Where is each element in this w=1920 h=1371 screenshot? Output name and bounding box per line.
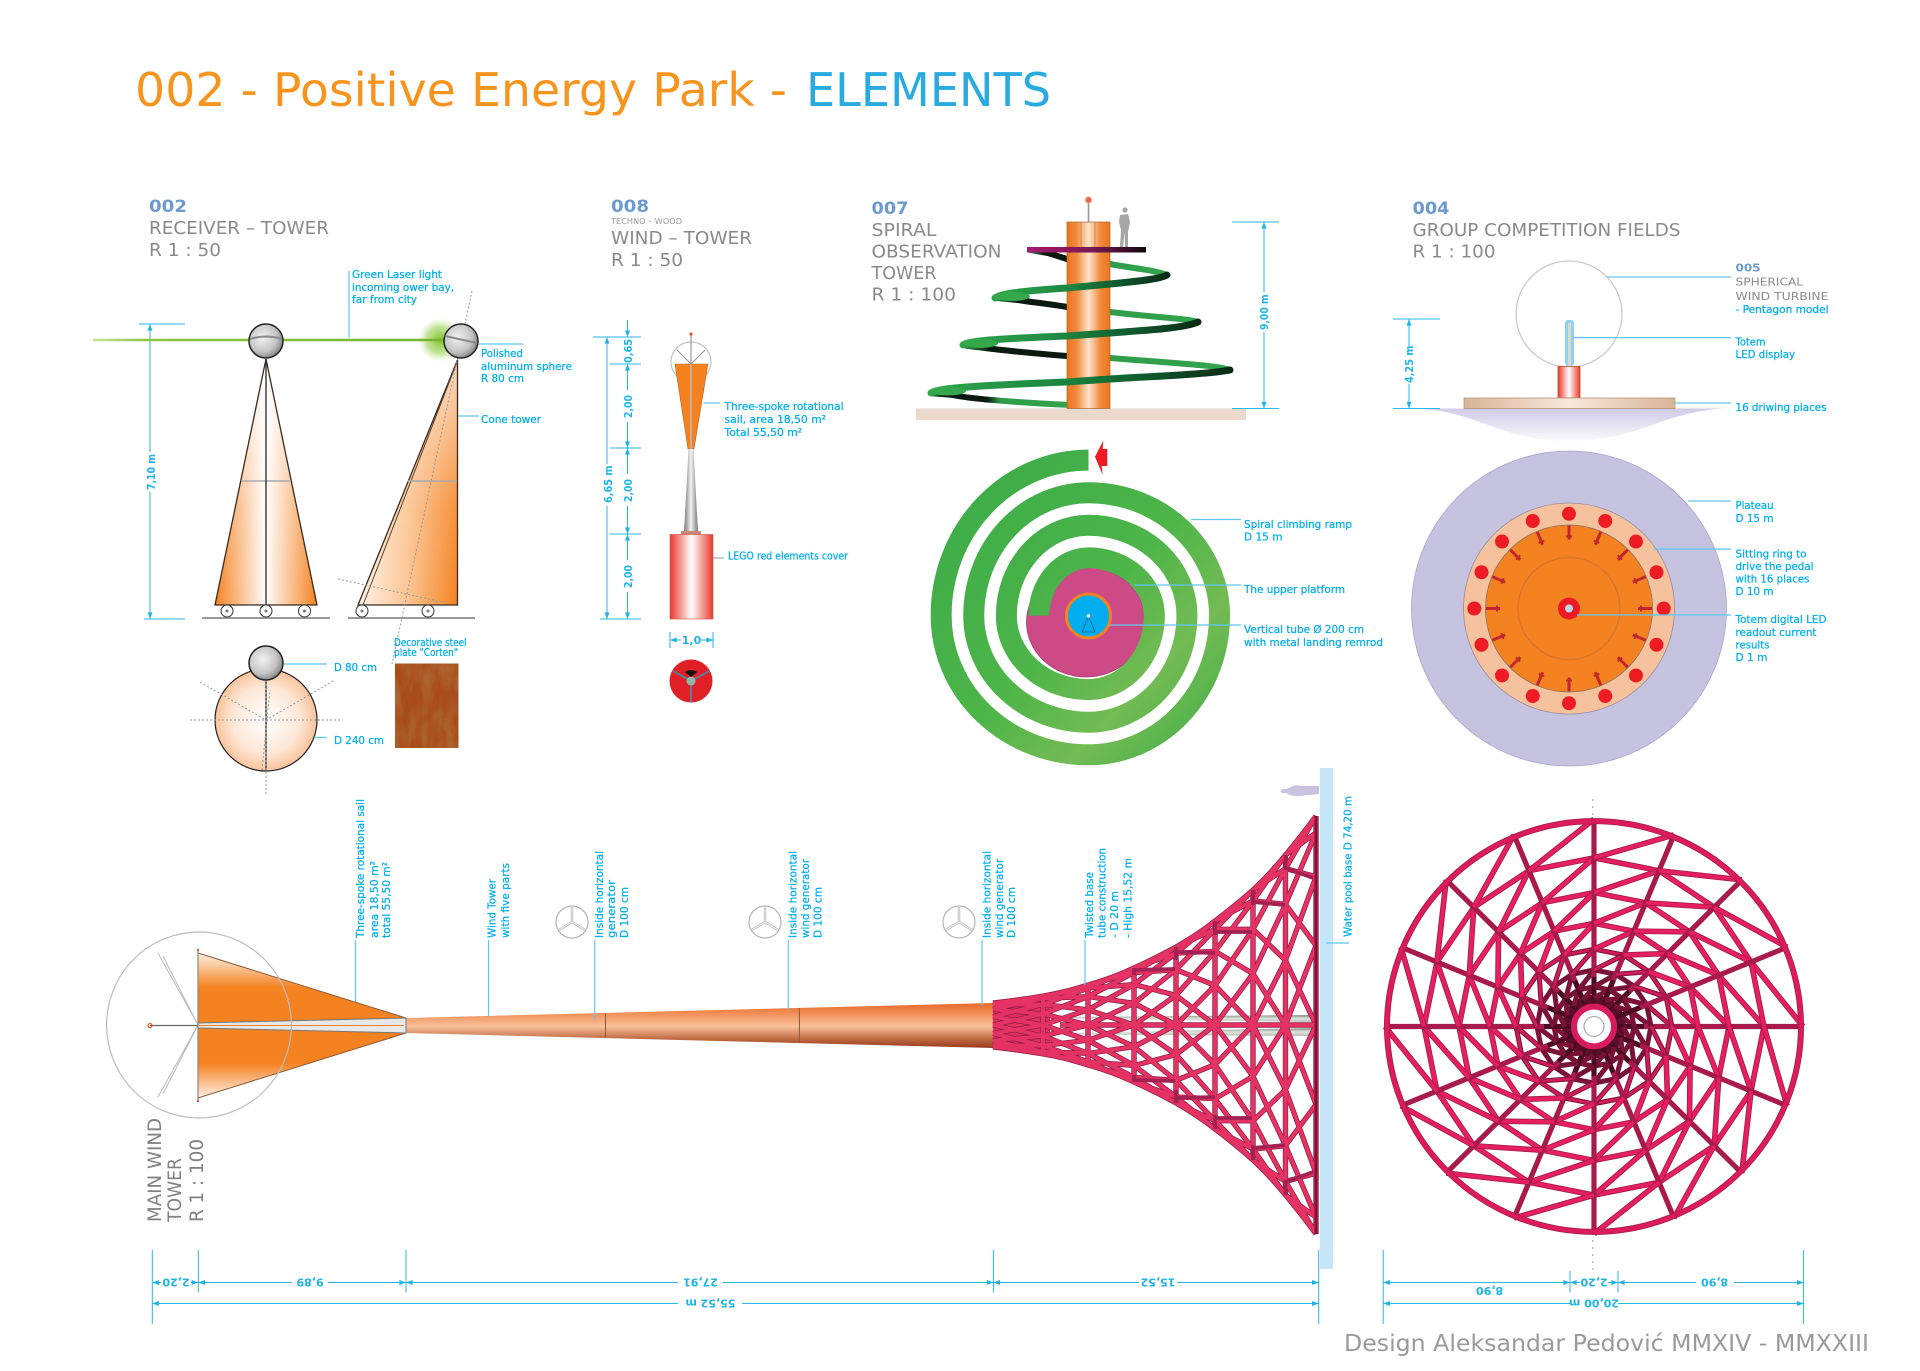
callout: spherical wind turbine: WIND TURBINE — [1736, 290, 1829, 303]
callout: three-spoke sail — [704, 400, 844, 439]
heading: main wind tower: TOWER — [164, 1158, 186, 1223]
totem elevation — [1418, 261, 1725, 441]
dimensions: main tower: 9,89 — [296, 1276, 324, 1288]
callout: spiral ramp: D 15 m — [1244, 530, 1282, 544]
heading: receiver tower — [149, 197, 329, 261]
callout: green laser: Green Laser light — [352, 268, 443, 281]
callout: wind tower five parts — [486, 863, 512, 1016]
dimensions: base plan: 8,90 — [1701, 1276, 1728, 1288]
dimensions: main tower: 27,91 — [683, 1276, 718, 1288]
dimension chain: 6,65 m — [602, 466, 615, 503]
callout: totem led: LED display — [1736, 348, 1795, 361]
dimension: 7,10 m: 7,10 m — [145, 454, 158, 490]
dimension: 7,10 m — [139, 324, 185, 619]
callout: water pool base: Water pool base D 74,20 m — [1342, 796, 1354, 937]
callout: totem digital readout: readout current — [1736, 626, 1817, 639]
dimensions: main tower: 15,52 — [1141, 1276, 1175, 1288]
icon: generator 2 — [749, 906, 781, 938]
dimension: 4,25 m — [1393, 319, 1440, 408]
callout: vertical tube: Vertical tube Ø 200 cm — [1244, 623, 1364, 636]
icon: generator 3 — [943, 906, 975, 938]
heading: group competition: GROUP COMPETITION FIELDS — [1412, 220, 1680, 241]
callout: twisted base — [1083, 848, 1134, 985]
callout: green laser — [349, 268, 454, 338]
callout: generator 1: generator — [605, 880, 618, 938]
corten steel swatch: plate "Corten" — [394, 646, 458, 659]
wind tower side view — [670, 332, 713, 619]
callout: generator 2: wind generator — [799, 859, 812, 938]
callout: generator 3 — [980, 851, 1018, 1006]
callout: plateau — [1688, 499, 1774, 525]
heading: spiral tower — [871, 199, 1002, 306]
callout: spiral ramp: Spiral climbing ramp — [1244, 518, 1352, 531]
callout: totem digital readout: Totem digital LED — [1735, 613, 1826, 626]
spiral elevation — [916, 197, 1246, 420]
icon: lying person — [1280, 785, 1319, 796]
heading: spiral tower: R 1 : 100 — [872, 284, 956, 306]
heading: spiral tower: 007 — [872, 199, 908, 219]
heading: group competition — [1412, 199, 1680, 262]
callout: sitting ring: D 10 m — [1736, 585, 1774, 598]
heading: spiral tower: OBSERVATION — [872, 242, 1002, 262]
dimension: 1,0: 1,0 — [682, 634, 702, 647]
icon: generator 1 — [556, 906, 588, 938]
callout: spherical wind turbine: - Pentagon model — [1736, 303, 1828, 316]
heading: receiver tower: RECEIVER – TOWER — [149, 218, 329, 239]
callout: totem led — [1573, 336, 1795, 361]
panel: wind tower — [593, 197, 848, 702]
callout: three-spoke sail: Total 55,50 m² — [724, 426, 802, 439]
dimensions: base plan — [1383, 1250, 1804, 1324]
callout: spherical wind turbine — [1607, 262, 1829, 316]
plan view cone tower: D 240 cm — [334, 734, 384, 747]
callout: wind tower five parts: with five parts — [499, 863, 512, 938]
callout: twisted base: - High 15,52 m — [1121, 858, 1134, 938]
callout: totem led: Totem — [1735, 336, 1766, 348]
heading: spiral tower: SPIRAL — [872, 220, 936, 241]
heading: wind tower: 008 — [611, 197, 649, 217]
callout: upper platform: The upper platform — [1243, 583, 1345, 596]
dimensions: main tower: 2,20 — [162, 1276, 190, 1288]
dimension: 1,0 — [670, 632, 713, 648]
water pool base — [1280, 768, 1333, 1269]
side view cone tower — [338, 291, 478, 664]
callout: three-spoke sail: sail, area 18,50 m² — [724, 413, 826, 426]
dimension chain: 2,00 — [622, 395, 635, 418]
callout: generator 2 — [786, 851, 824, 1010]
callout: green laser: incoming ower bay, — [352, 281, 454, 294]
dimensions: base plan: 2,20 — [1580, 1276, 1608, 1288]
callout: driving places: 16 driwing places — [1736, 401, 1827, 414]
dimension chain: 2,00 — [622, 479, 635, 502]
heading: receiver tower: 002 — [149, 197, 187, 217]
callout: vertical tube: with metal landing remrod — [1244, 636, 1383, 649]
wind tower plan — [670, 660, 712, 702]
callout: polished sphere: R 80 cm — [481, 372, 524, 385]
credit line: Design Aleksandar Pedović MMXIV - MMXXIII — [1344, 1331, 1869, 1357]
icon: person — [1119, 207, 1130, 247]
callout: generator 2: Inside horizontal — [786, 851, 800, 938]
panel: spiral observation tower — [871, 197, 1383, 755]
callout: twisted base: Twisted base — [1083, 872, 1096, 939]
panel: group competition fields — [1393, 199, 1829, 766]
callout: vertical tube — [1110, 623, 1383, 649]
callout: generator 1 — [593, 851, 631, 1020]
callout: green laser: far from city — [352, 293, 417, 306]
heading: main wind tower: R 1 : 100 — [186, 1139, 208, 1222]
callout: totem digital readout — [1577, 613, 1826, 664]
tower shaft — [406, 1003, 994, 1048]
heading: group competition: R 1 : 100 — [1412, 242, 1496, 262]
callout: totem digital readout: D 1 m — [1736, 651, 1768, 664]
callout: three-spoke sail: Three-spoke rotational — [724, 400, 844, 413]
callout: cone tower: Cone tower — [481, 413, 541, 426]
dimension chain: 2,00 — [622, 565, 635, 588]
corten steel swatch — [394, 636, 466, 748]
twisted base truss — [993, 816, 1316, 1234]
dimension: 9,00 m — [1232, 222, 1279, 408]
heading: group competition: 004 — [1412, 199, 1450, 219]
dimension: 4,25 m: 4,25 m — [1403, 346, 1416, 383]
callout: spherical wind turbine: SPHERICAL — [1736, 276, 1804, 288]
panel: base plan — [1376, 799, 1812, 1324]
base lattice plan — [1376, 799, 1812, 1271]
panel: main wind tower — [107, 768, 1355, 1324]
callout: three-spoke sail rotated: area 18,50 m² — [368, 861, 381, 938]
heading: wind tower: TECHNO – WOOD — [610, 217, 682, 226]
callout: spiral ramp — [1191, 518, 1352, 544]
icon: red arrow — [1095, 441, 1107, 475]
callout: three-spoke sail rotated: total 55,50 m² — [380, 862, 393, 938]
callout: plateau: Plateau — [1736, 499, 1774, 512]
heading: receiver tower: R 1 : 50 — [149, 240, 221, 261]
spiral plan — [941, 441, 1220, 755]
heading: wind tower: WIND – TOWER — [611, 228, 752, 249]
heading: spiral tower: TOWER — [871, 263, 936, 284]
heading: wind tower: R 1 : 50 — [611, 250, 683, 271]
dimension chain: 0,65 — [622, 339, 635, 363]
heading: wind tower — [610, 197, 752, 271]
callout: polished sphere — [478, 344, 572, 385]
callout: lego: LEGO red elements cover — [728, 550, 848, 562]
dimensions: main tower: 55,52 m — [685, 1296, 735, 1310]
callout: twisted base: tube construction — [1096, 848, 1109, 938]
dimension chain — [593, 320, 641, 619]
callout: sitting ring: Sitting ring to — [1736, 548, 1807, 560]
corten steel swatch: Decorative steel — [394, 636, 466, 649]
callout: wind tower five parts: Wind Tower — [486, 879, 498, 938]
green laser line — [93, 318, 462, 362]
callout: plateau: D 15 m — [1736, 512, 1774, 525]
callout: generator 1: D 100 cm — [618, 887, 631, 938]
title: 002 - Positive Energy Park - — [135, 63, 787, 117]
front view cone tower — [202, 324, 330, 618]
callout: totem digital readout: results — [1736, 638, 1770, 652]
callout: generator 3: wind generator — [993, 859, 1006, 938]
callout: polished sphere: Polished — [481, 347, 523, 360]
callout: generator 1: Inside horizontal — [593, 851, 606, 938]
heading: main wind tower — [144, 1118, 208, 1223]
callout: polished sphere: aluminum sphere — [481, 360, 572, 373]
sail and rotor — [107, 932, 406, 1118]
callout: twisted base: - D 20 m — [1108, 891, 1121, 938]
dimensions: base plan: 20,00 m — [1569, 1296, 1619, 1310]
callout: sitting ring: drive the pedal — [1736, 560, 1814, 573]
callout: three-spoke sail rotated: Three-spoke rotational sail — [354, 799, 367, 939]
callout: generator 2: D 100 cm — [812, 887, 824, 938]
callout: generator 3: D 100 cm — [1005, 887, 1018, 938]
title — [135, 63, 1051, 117]
callout: three-spoke sail rotated — [354, 799, 393, 1002]
panel: receiver tower — [93, 197, 572, 796]
callout: sitting ring — [1654, 548, 1814, 598]
callout: generator 3: Inside horizontal — [980, 851, 994, 938]
dimensions: main tower — [152, 1250, 1319, 1324]
title: ELEMENTS — [806, 63, 1051, 117]
callout: sitting ring: with 16 places — [1736, 572, 1810, 586]
dimension: 9,00 m: 9,00 m — [1258, 294, 1271, 330]
heading: main wind tower: MAIN WIND — [144, 1118, 166, 1222]
plan view cone tower — [190, 646, 384, 796]
plan view cone tower: D 80 cm — [334, 661, 377, 674]
dimensions: base plan: 8,90 — [1476, 1284, 1503, 1297]
callout: spherical wind turbine: 005 — [1736, 262, 1760, 274]
field plan — [1412, 451, 1726, 766]
